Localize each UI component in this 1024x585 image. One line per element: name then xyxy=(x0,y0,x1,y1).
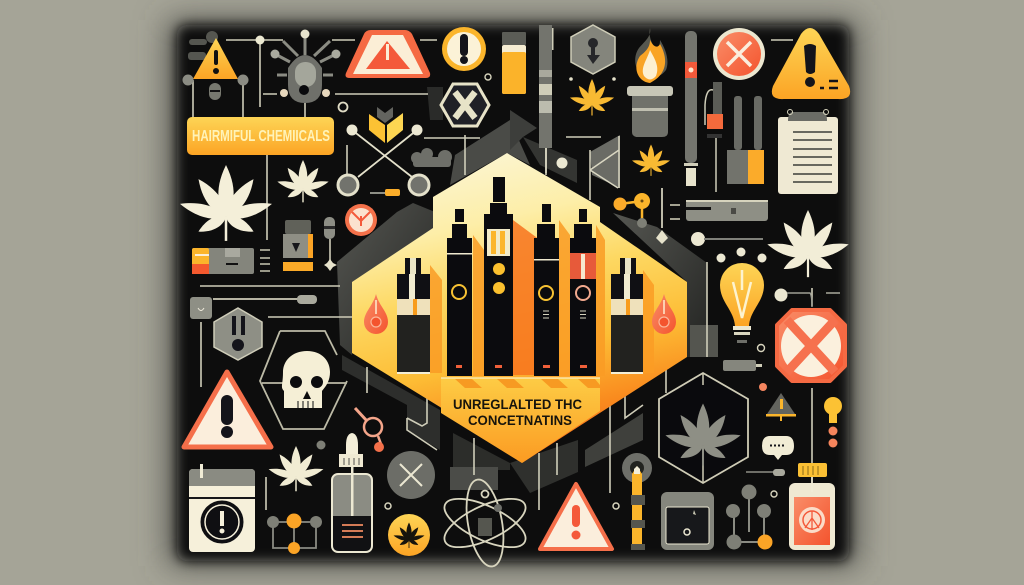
dark grey angular backdrop xyxy=(337,87,718,493)
icon: grey cloud xyxy=(411,148,452,167)
icon: crossed chemical nodes xyxy=(338,124,429,196)
icon: red trapezoid warning xyxy=(346,30,430,78)
icon: lightbulb xyxy=(720,263,764,343)
icon: calendar warning xyxy=(189,464,255,552)
icon: ball connector xyxy=(774,288,840,307)
vape pen 1 xyxy=(397,258,430,374)
icon: three dots xyxy=(716,248,766,262)
icon: red warning triangle bottom xyxy=(540,484,612,549)
panel: black backdrop xyxy=(168,20,858,566)
icon: red drop right xyxy=(652,294,676,334)
icon: horizontal grey pen xyxy=(670,200,768,221)
icon: grey molecule bug xyxy=(256,30,340,103)
icon: small yellow warning triangle xyxy=(182,31,248,100)
icon: grey dot xyxy=(316,440,326,450)
banner: unregulated THC concentrates xyxy=(441,378,600,463)
icon: hexagon with X xyxy=(441,84,489,126)
vape shadows xyxy=(430,220,654,376)
icon: grey hexagon exclamation xyxy=(214,308,262,360)
icon: small dots xyxy=(569,77,616,81)
vape pen 3 xyxy=(484,177,513,376)
icon: grey X circle xyxy=(387,451,435,499)
icon: ring small xyxy=(338,102,348,112)
icon: grey pin with star xyxy=(324,217,337,271)
icon: orange molecule xyxy=(614,193,650,228)
icon: ball and bar xyxy=(691,232,763,246)
vape pen 4 xyxy=(534,204,559,376)
icon: pink key molecule xyxy=(355,408,384,452)
icon: yellow cartridge pen xyxy=(613,453,652,550)
icon: battery xyxy=(192,248,270,274)
icon: hexagon leaf xyxy=(659,373,748,483)
icon: yellow book shield xyxy=(369,107,403,143)
icon: small vial xyxy=(283,220,313,271)
icon: ball on grey plate xyxy=(556,158,568,168)
vape pen 6 xyxy=(611,258,643,374)
icon: orange bottle xyxy=(789,463,835,550)
icon: grey pen xyxy=(539,25,554,175)
icon: ring small top xyxy=(485,74,491,80)
icon: speech bubble xyxy=(762,436,794,460)
icon: red octagon X xyxy=(777,310,845,381)
icon: exclamation circle xyxy=(442,27,486,71)
icon: node molecule xyxy=(267,514,322,554)
icon: red circle X xyxy=(713,28,765,80)
icon: large red warning triangle xyxy=(184,372,271,447)
banner: harmful chemicals: HAIRMIFUL CHEMIICALS xyxy=(192,128,330,145)
icon: node tree xyxy=(726,484,777,550)
icon: small grey box with u xyxy=(190,297,212,319)
icon: triangular grey flag xyxy=(590,135,620,200)
icon: small pen xyxy=(705,82,723,192)
vape pen 5 xyxy=(570,209,596,376)
icon: golden leaf xyxy=(569,79,615,116)
icon: atom xyxy=(438,477,532,569)
icon: grey keyhole hexagon xyxy=(571,25,615,74)
icon: golden leaf small xyxy=(631,144,671,176)
icon: red no circle xyxy=(345,204,377,236)
icon: orange capsule line xyxy=(746,469,785,476)
banner: unregulated THC concentrates: CONCETNATINS xyxy=(468,412,572,428)
banner: unregulated THC concentrates: UNREGLALTED THC xyxy=(453,396,582,412)
icon: small yellow bulb with dots xyxy=(824,397,842,448)
icon: ring and yellow leaf badge xyxy=(385,503,430,556)
connector lines xyxy=(193,40,812,510)
icon: diamond pin xyxy=(656,188,668,244)
icon: large cream leaf right xyxy=(766,210,850,277)
vape pen 2 xyxy=(447,209,472,376)
icon: vial top xyxy=(502,32,526,94)
icon: tall red band pen xyxy=(684,31,698,186)
icon: red drop left xyxy=(364,294,388,334)
icon: small ring and capsule xyxy=(723,344,767,391)
icon: dual device charger xyxy=(727,96,764,184)
icon: cream leaf bottom xyxy=(268,446,324,491)
icon: clipboard xyxy=(778,110,838,194)
icon: large yellow warning triangle xyxy=(772,28,850,99)
icon: skull hexagon xyxy=(260,331,347,429)
banner: harmful chemicals xyxy=(187,117,334,155)
icon: dark warning bell xyxy=(766,393,796,421)
icon: small cannabis leaf xyxy=(276,160,330,202)
icon: large cannabis leaf xyxy=(178,165,274,241)
icon: flame in cup xyxy=(627,28,673,137)
icon: dropper bottle xyxy=(332,433,372,552)
central hexagon xyxy=(352,153,687,463)
icon: screen device xyxy=(661,492,714,550)
decorative capsule bar xyxy=(213,295,317,304)
